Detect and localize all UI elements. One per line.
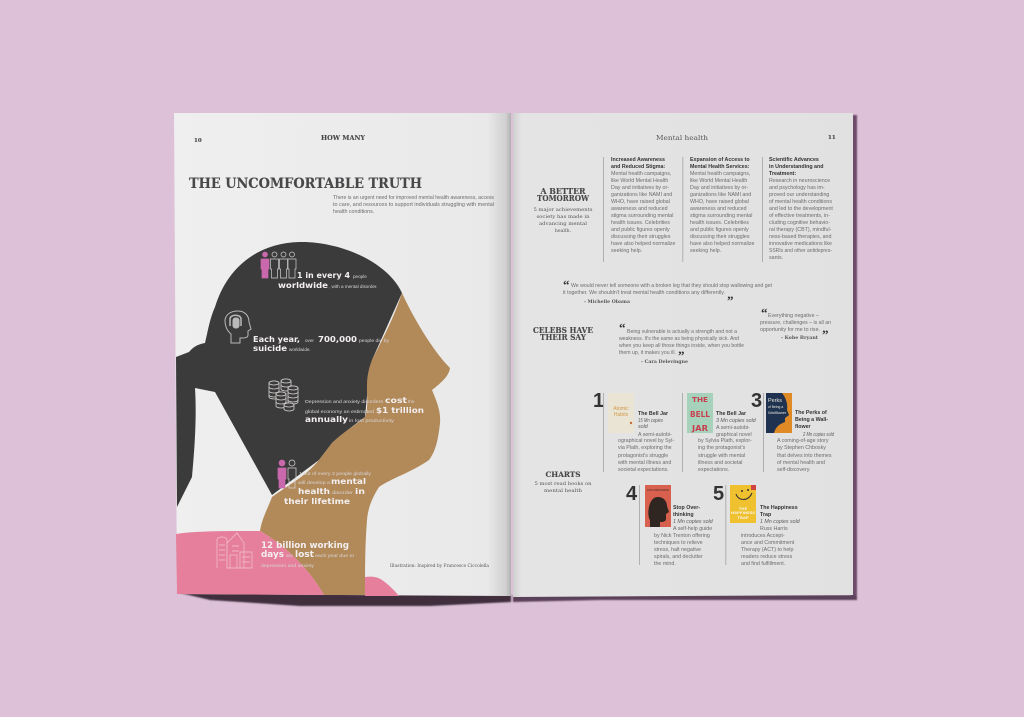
book 1: A semi-autobi- [638,432,672,438]
section: a better tomorrow: 5 major achievements [534,207,593,213]
section: a better tomorrow: TOMORROW [537,193,590,203]
quote: Kobe Bryant: ” [822,327,828,342]
column: access [682,157,755,262]
stat: working days: days [261,550,284,560]
column: awareness: ganizations like NAMI and [611,192,672,198]
stat: working days [217,533,354,568]
icon: two people [278,460,296,488]
quote: Michelle Obama [563,277,773,308]
stat: cost: cost [385,396,407,405]
intro text: health conditions. [333,209,374,215]
quote: Cara Delevingne: - Cara Delevingne [641,359,688,365]
book 4: techniques to relieve [654,540,703,546]
book 2: 3 Mn copies sold [716,418,757,424]
icon: coin stacks [269,379,298,411]
stat: cost [269,379,424,424]
book 5: 1 Mn copies sold [760,519,801,525]
cover: Stop Overthinking: STOP OVERTHINKING [647,488,669,492]
stat: suicide: people die by [359,338,390,343]
stat: suicide: suicide [253,344,288,353]
stat: 1 out of 2: disorder [332,490,354,495]
intro text [333,195,494,215]
quote: Cara Delevingne: “ [619,320,626,335]
column: access: like World Mental Health [690,178,747,184]
section: a better tomorrow: health. [555,228,572,234]
quote: Kobe Bryant: opportunity for me to rise. [760,327,820,333]
book 1: societal expectations. [618,467,669,473]
heading: celebs have their say: CELEBS HAVE [533,325,593,335]
book 3: self-discovery. [777,467,810,473]
book 2: by Sylvia Plath, explor- [698,438,752,444]
column: awareness [603,157,676,262]
book 5: Russ Harris [760,526,788,532]
panel: right page [513,113,853,597]
stat: working days: each year due to [315,553,354,558]
book 1: The Bell Jar [638,411,668,417]
stat: 1 out of 2: will develop a [298,480,330,485]
book 1: sold [638,424,649,430]
book 3: by Stephen Chbosky [777,445,826,451]
book 3: The Perks of [795,410,827,416]
book 2 [682,393,757,473]
intro text: There is an urgent need for improved mental health awareness, access [333,195,494,201]
column: science: of effective treatments, in- [769,213,830,219]
column: science: Research in neuroscience [769,178,830,184]
shirt left [176,531,324,595]
stat: 1 in 4: , with a mental disorder. [329,284,378,289]
stat: cost: annually [305,415,349,424]
book 5: The Happiness [760,505,798,511]
column: access: discussing their struggles [690,234,750,240]
stat: 1 out of 2 [278,460,372,506]
stat: cost: in lost productivity [349,418,395,423]
stat: 1 in 4: people [353,274,367,279]
column: access: Mental Health Services: [690,164,750,170]
heading: charts: CHARTS [546,470,580,479]
section: a better tomorrow: society has made in [536,214,590,220]
page number 11: 11 [828,135,836,141]
illustration credit: Illustration: Inspired by Francesco Ciccolella [390,563,490,568]
quote: Cara Delevingne: when you keep all those things inside, when you bottle [619,343,744,349]
hair [176,242,402,507]
title: THE UNCOMFORTABLE TRUTH [189,176,422,192]
book 3: 2 Mn copies sold [802,432,835,438]
magazine shadow [180,115,857,606]
column: science: of mental health conditions [769,199,832,205]
quote: Kobe Bryant: Everything negative – [768,313,819,319]
quote: Cara Delevingne: ” [678,348,684,363]
book 5: readers reduce stress [741,554,793,560]
quote: Michelle Obama: We would never tell someone with a broken leg that they should stop wallowing and get [571,283,773,289]
stat: suicide: worldwide. [289,347,311,352]
book 1: with mental illness and [618,460,671,466]
quote: Kobe Bryant: - Kobe Bryant [781,335,819,341]
book 3: that delves into themes [777,453,832,459]
column: awareness: health issues. Celebrities [611,220,670,226]
book 1: ographical novel by Syl- [618,438,674,444]
running head: Mental health [656,134,708,142]
cover: Atomic Habits [608,393,634,433]
column: awareness: have also helped normalize [611,241,676,247]
stat: 1 out of 2: mental [331,477,366,486]
book 1 [593,390,674,473]
book 4: 4 [626,483,638,505]
cover: The Bell Jar: BELL [690,410,710,419]
column: awareness: stigma surrounding mental [611,213,673,219]
column: access: awareness and reduced [690,206,747,212]
shirt right [365,577,399,596]
book 3: Being a Wall- [795,417,828,423]
column: awareness: WHO, have raised global [611,199,670,205]
cover: The Happiness Trap: TRAP [737,515,749,520]
book 4: spirals, and declutter [654,554,703,560]
stat: 1 out of 2: in [355,487,365,496]
book 2: ing the protagonist's [698,445,746,451]
heading: charts [534,470,592,494]
stat: cost: the [408,399,415,404]
column: access: WHO, have raised global [690,199,749,205]
column: awareness: discussing their struggles [611,234,671,240]
section: a better tomorrow: advancing mental [539,221,588,227]
column: access: and public figures openly [690,227,749,233]
quote: Cara Delevingne [619,320,744,365]
column: awareness: like World Mental Health [611,178,668,184]
cover: The Bell Jar: THE [692,396,708,404]
book 1: 15 Mn copies [638,418,663,424]
stat: cost: Depression and anxiety disorders [305,399,384,404]
quote: Michelle Obama: ” [727,293,734,308]
book 5: introduces Accept- [741,533,785,539]
book 1: protagonist's struggle [618,453,668,459]
section: a better tomorrow [534,186,593,234]
quote: Michelle Obama: “ [563,277,570,292]
book 2: struggle with mental [698,453,745,459]
heading: celebs have their say [533,325,593,342]
cover: The Happiness Trap: THE [739,506,748,511]
book 2: The Bell Jar [716,411,746,417]
cover: The Happiness Trap [730,485,756,523]
book 4: 1 Mn copies sold [673,519,714,525]
stat: working days: depression and anxiety [261,563,315,568]
book 3: 3 [751,390,762,412]
column: science: Treatment: [769,171,796,177]
stat: 1 in 4: 1 in every 4 [297,271,350,280]
quote: Michelle Obama: - Michelle Obama [584,299,630,305]
column: access: Day and initiatives by or- [690,185,748,191]
column: access: health issues. Celebrities [690,220,749,226]
column: awareness: Day and initiatives by or- [611,185,669,191]
column: science: and led to the development [769,206,833,212]
running head: HOW MANY [321,134,365,142]
book 4: stress, halt negative [654,547,701,553]
quote: Kobe Bryant: pressure, challenges – is all an [760,320,831,326]
heading: celebs have their say: THEIR SAY [540,332,586,342]
icon: office buildings [217,533,252,568]
cover: The Perks of Being a Wallflower: Wallflower [768,410,787,415]
book 3: flower [795,424,811,430]
column: access: Mental health campaigns, [690,171,750,177]
cover: The Perks of Being a Wallflower [766,393,792,433]
book 3 [751,390,835,473]
column: awareness: and Reduced Stigma: [611,164,665,170]
column: access: Expansion of Access to [690,157,750,163]
stat: cost: $1 trillion [376,406,424,415]
column: science: innovative medications like [769,241,832,247]
column: science: SSRIs and other antidepres- [769,248,832,254]
quote: Kobe Bryant: “ [761,305,768,320]
cover: The Bell Jar: JAR [691,424,708,433]
stat: 1 in 4: worldwide [278,281,329,290]
book 5: and find fulfillment. [741,561,785,567]
book 2: graphical novel [716,432,752,438]
quote: Michelle Obama: it together. We shouldn't treat mental health conditions any differently. [563,290,725,296]
column: awareness: Mental health campaigns, [611,171,671,177]
book 4: the mind. [654,561,676,567]
icon: four people [261,252,296,278]
stat: working days: 12 billion working [261,541,349,551]
book 5: ance and Commitment [741,540,795,546]
stat: 1 out of 2: health [298,487,330,496]
quote: Cara Delevingne: weakness. It's the same as being physically sick. And [619,336,739,342]
book 5: 5 [713,483,724,505]
book 2: A semi-autobi- [716,425,750,431]
book 3: A coming-of-age story [777,438,829,444]
book 1: via Plath, exploring the [618,445,672,451]
book 4: by Nick Trenton offering [654,533,710,539]
cover: The Happiness Trap: HAPPINESS [731,510,755,515]
book 2: expectations. [698,467,729,473]
section: a better tomorrow: A BETTER [540,186,586,196]
book 2: illness and societal [698,460,742,466]
book 4 [626,483,714,567]
stat: working days: lost [295,550,314,560]
cover: Atomic Habits: Atomic [613,406,629,412]
icon: head with headphones [225,311,251,343]
column: science: proved our understanding [769,192,829,198]
column: science: sants. [769,255,783,261]
stat: suicide [225,311,390,353]
column: access: seeking help. [690,248,721,254]
book 1: 1 [593,390,604,412]
column: awareness: awareness and reduced [611,206,668,212]
column: access: ganizations like NAMI and [690,192,751,198]
stat: 1 out of 2: their lifetime [284,497,351,506]
heading: charts: 5 most read books on [534,481,592,487]
stat: working days: are [286,553,293,558]
heading: charts: mental health [544,488,582,494]
column: awareness: and public figures openly [611,227,670,233]
book 3: of mental health and [777,460,825,466]
cover: The Perks of Being a Wallflower: of Being a [768,405,783,409]
book 5 [713,483,801,567]
column: science [762,157,833,262]
panel: left page [174,113,511,596]
book 4: A self-help guide [673,526,712,532]
illustration: woman profile [176,242,450,596]
book 4: Stop Over- [673,505,700,511]
book 5: Trap [760,512,772,518]
column: science: in Understanding and [769,164,823,170]
column: science: ness-based therapies, and [769,234,831,240]
quote: Kobe Bryant [760,305,831,342]
stat: suicide: 700,000 [318,335,357,344]
book 5: Therapy (ACT) to help [741,547,793,553]
column: access: have also helped normalize [690,241,755,247]
intro text: to care, and resources to support individuals struggling with mental [333,202,494,208]
cover: Atomic Habits: Habits [614,412,629,418]
column: awareness: Increased Awareness [611,157,665,163]
quote: Cara Delevingne: Being vulnerable is actually a strength and not a [627,329,737,335]
face [260,293,450,595]
quote: Cara Delevingne: them up, it makes you ill. [619,350,676,356]
column: science: ral therapy (CBT), mindful- [769,227,832,233]
stat: suicide: Each year, [253,335,300,344]
book 4: thinking [673,512,694,518]
page number 10: 10 [194,138,202,144]
stat: cost: global economy an estimated [305,409,375,414]
stat: 1 out of 2: 1 out of every 2 people globally [299,471,372,476]
column: awareness: seeking help. [611,248,642,254]
column: science: and psychology has im- [769,185,825,191]
cover: The Bell Jar [687,393,713,433]
cover: The Perks of Being a Wallflower: Perks [768,398,782,404]
column: access: stigma surrounding mental [690,213,752,219]
stat: suicide: over [305,338,314,343]
column: science: Scientific Advances [769,157,819,163]
column: science: cluding cognitive behavio- [769,220,830,226]
stat: 1 in 4 [261,252,378,290]
